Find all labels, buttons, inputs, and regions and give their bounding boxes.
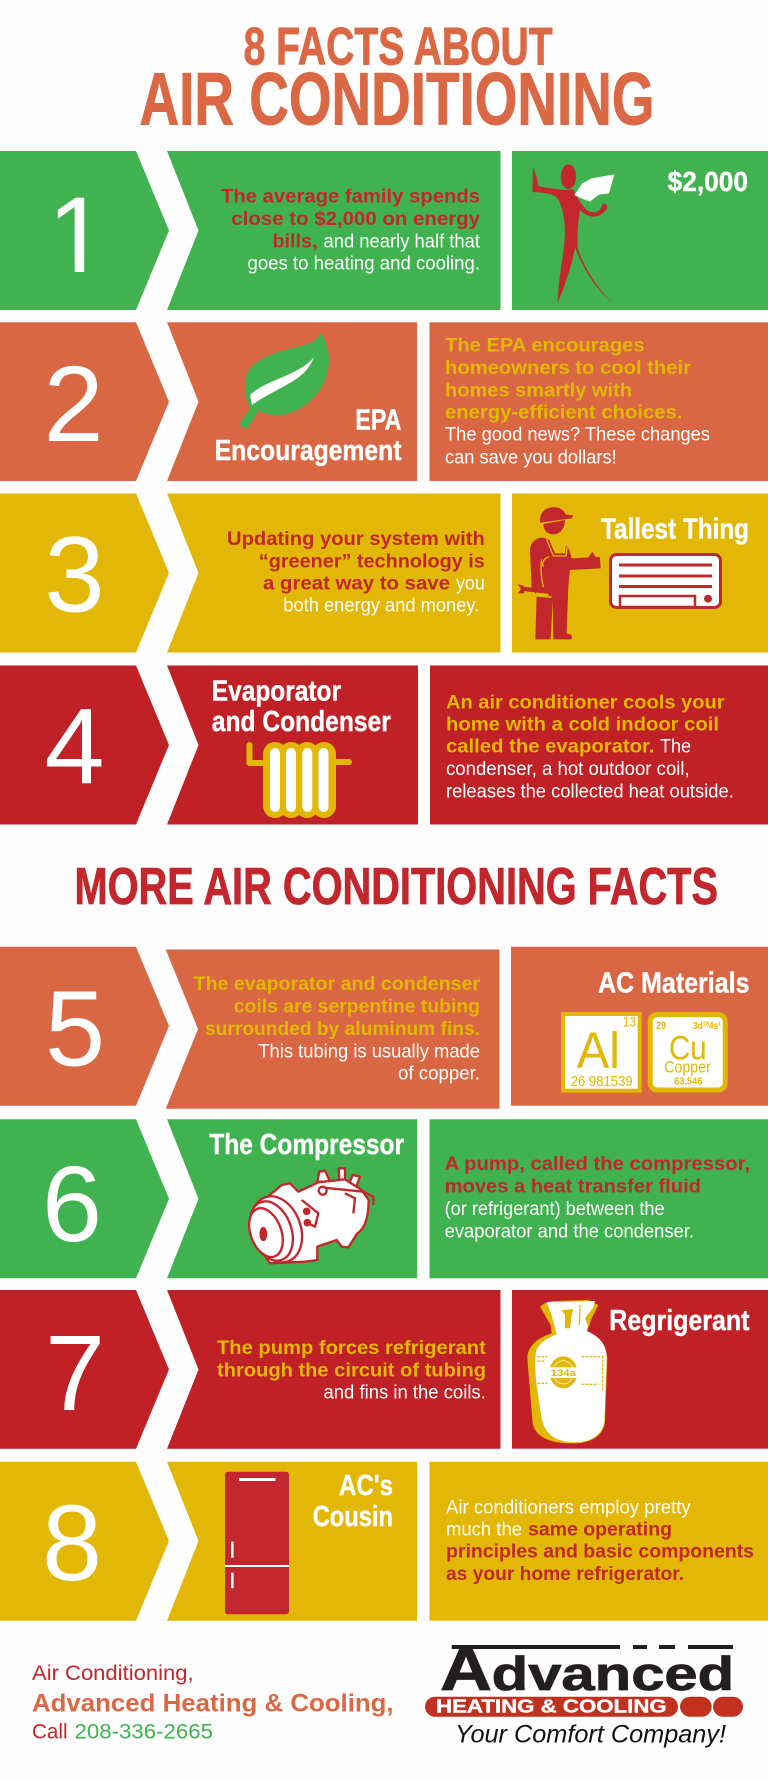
number chevron 3: [0, 494, 169, 652]
fact 4 heading and icon: and Condenser: [212, 706, 391, 738]
fact 1 text: and nearly half that: [324, 231, 481, 252]
fact 3 icon panel: [512, 494, 768, 652]
number chevron 7: [0, 1290, 169, 1449]
fact 2 text: The EPA encourages: [445, 336, 645, 357]
fact 1 text: bills,: [272, 231, 318, 252]
icon: leaf: [239, 333, 329, 429]
icon: air conditioner unit: [610, 554, 720, 608]
panel: fact 4: [0, 666, 768, 824]
fact 6 text: evaporator and the condenser.: [445, 1221, 694, 1242]
fact 2 text: The good news? These changes: [445, 425, 710, 446]
fact 2 text: [430, 322, 768, 481]
fact 7 icon panel: Regrigerant: [609, 1305, 750, 1337]
icon: aluminum element tile: 26 981539: [571, 1073, 633, 1090]
icon: copper element tile: 63.546: [674, 1077, 703, 1088]
fact 5 icon panel: [511, 947, 768, 1106]
fact 1 text: [167, 151, 500, 310]
icon: aluminum element tile: Al: [577, 1022, 620, 1079]
icon: compressor: [242, 1168, 373, 1269]
icon: aluminum element tile: [563, 1014, 640, 1091]
fact 1 text: close to $2,000 on energy: [231, 209, 480, 230]
logo: Advanced Heating & Cooling: A: [440, 1636, 492, 1703]
panel: fact 7: [0, 1290, 768, 1449]
icon: radiator: [250, 742, 349, 818]
title: 8 FACTS ABOUT: [244, 17, 553, 76]
fact 4 text: called the evaporator.: [446, 737, 654, 758]
icon: aluminum element tile: 13: [623, 1014, 636, 1030]
fact 8 heading and icon: AC's: [339, 1470, 393, 1502]
fact 6 text: moves a heat transfer fluid: [445, 1176, 701, 1197]
fact 3 text: you: [456, 573, 485, 594]
number chevron 5: [0, 947, 169, 1106]
number chevron 4: 4: [44, 685, 105, 806]
title: [140, 17, 654, 140]
fact 7 text: through the circuit of tubing: [217, 1360, 486, 1381]
number chevron 7: 7: [45, 1312, 105, 1433]
footer contact text: Air Conditioning,: [32, 1662, 194, 1685]
fact 3 text: both energy and money.: [283, 596, 479, 617]
logo: Advanced Heating & Cooling: dvanced: [492, 1647, 734, 1700]
fact 2 text: can save you dollars!: [445, 447, 617, 468]
number chevron 6: [0, 1119, 169, 1278]
fact 6 text: [430, 1119, 768, 1278]
icon: copper element tile: Cu: [669, 1029, 707, 1067]
fact 5 text: of copper.: [398, 1063, 480, 1084]
fact 7 text: The pump forces refrigerant: [217, 1338, 487, 1359]
fact 7 icon panel: [512, 1290, 768, 1449]
footer contact text: [32, 1662, 394, 1743]
icon: refrigerant tank: [527, 1300, 607, 1443]
fact 8 text: principles and basic components: [446, 1542, 754, 1563]
footer contact text: Advanced Heating & Cooling,: [32, 1690, 394, 1718]
fact 2 heading and icon: Encouragement: [215, 435, 402, 467]
fact 6 heading and icon: The Compressor: [209, 1129, 404, 1161]
icon: copper element tile: 29: [656, 1020, 666, 1032]
number chevron 3: 3: [44, 514, 105, 634]
fact 2 heading and icon: EPA: [355, 404, 401, 436]
fact 4 text: [430, 666, 768, 824]
panel: fact 1: [0, 151, 768, 310]
fact 8 heading and icon: [167, 1462, 417, 1621]
panel: fact 8: [0, 1462, 768, 1621]
fact 2 heading and icon: [167, 322, 417, 481]
fact 2 text: homes smartly with: [445, 380, 632, 402]
fact 4 text: home with a cold indoor coil: [446, 715, 719, 736]
number chevron 1: 1: [47, 174, 108, 295]
fact 1 icon panel: [512, 151, 768, 310]
fact 7 text: and fins in the coils.: [324, 1383, 486, 1404]
fact 6 text: A pump, called the compressor,: [445, 1154, 750, 1175]
fact 6 heading and icon: [167, 1119, 417, 1278]
fact 8 text: same operating: [528, 1520, 672, 1541]
fact 1 icon panel: $2,000: [668, 166, 748, 197]
fact 1 text: The average family spends: [221, 187, 480, 208]
number chevron 2: [0, 322, 169, 481]
fact 3 text: a great way to save: [263, 573, 450, 594]
icon: refrigerator: [225, 1472, 289, 1614]
panel: fact 6: [0, 1119, 768, 1278]
number chevron 8: [0, 1462, 169, 1621]
logo: Advanced Heating & Cooling: HEATING & COOLING: [436, 1697, 667, 1717]
icon: copper element tile: 3d¹⁰4s¹: [693, 1021, 722, 1032]
number chevron 2: 2: [43, 343, 104, 464]
icon: technician: [517, 507, 601, 639]
fact 8 heading and icon: Cousin: [313, 1501, 393, 1533]
fact 4 text: The: [660, 737, 691, 758]
number chevron 5: 5: [45, 968, 105, 1088]
fact 8 text: Air conditioners employ pretty: [446, 1497, 691, 1518]
logo: Advanced Heating & Cooling: [425, 1636, 743, 1749]
fact 5 text: This tubing is usually made: [258, 1041, 480, 1062]
fact 4 text: releases the collected heat outside.: [446, 781, 734, 802]
fact 6 text: (or refrigerant) between the: [445, 1199, 665, 1220]
fact 7 text: [167, 1290, 500, 1449]
fact 3 text: Updating your system with: [227, 529, 485, 550]
fact 8 text: as your home refrigerator.: [446, 1564, 684, 1585]
fact 4 text: An air conditioner cools your: [446, 692, 725, 713]
fact 4 heading and icon: [167, 666, 418, 824]
icon: refrigerant tank: 134a: [551, 1368, 577, 1378]
icon: man fanning money: [532, 164, 614, 303]
fact 3 text: “greener” technology is: [259, 551, 485, 572]
number chevron 1: [0, 151, 169, 310]
icon: copper element tile: [650, 1014, 725, 1090]
fact 4 text: condenser, a hot outdoor coil,: [446, 759, 690, 780]
footer contact text: Call: [32, 1720, 68, 1743]
number chevron 4: [0, 666, 169, 824]
fact 5 text: surrounded by aluminum fins.: [205, 1019, 480, 1040]
logo: Advanced Heating & Cooling: Your Comfort Company!: [455, 1722, 726, 1749]
fact 5 text: coils are serpentine tubing: [234, 997, 480, 1018]
fact 3 text: [167, 494, 500, 652]
fact 8 text: [430, 1462, 768, 1621]
fact 5 text: The evaporator and condenser: [194, 974, 481, 995]
panel: fact 2: [0, 322, 768, 481]
panel: fact 3: [0, 494, 768, 652]
number chevron 8: 8: [42, 1482, 102, 1603]
number chevron 6: 6: [42, 1143, 102, 1264]
fact 5 text: [166, 950, 499, 1109]
footer contact text: 208-336-2665: [74, 1720, 213, 1743]
fact 4 heading and icon: Evaporator: [212, 676, 341, 708]
fact 1 text: goes to heating and cooling.: [248, 253, 480, 274]
panel: fact 5: [0, 947, 768, 1109]
icon: copper element tile: Copper: [664, 1058, 711, 1077]
fact 2 text: energy-efficient choices.: [445, 402, 682, 424]
fact 8 text: much the: [446, 1520, 522, 1541]
fact 2 text: homeowners to cool their: [445, 358, 692, 379]
